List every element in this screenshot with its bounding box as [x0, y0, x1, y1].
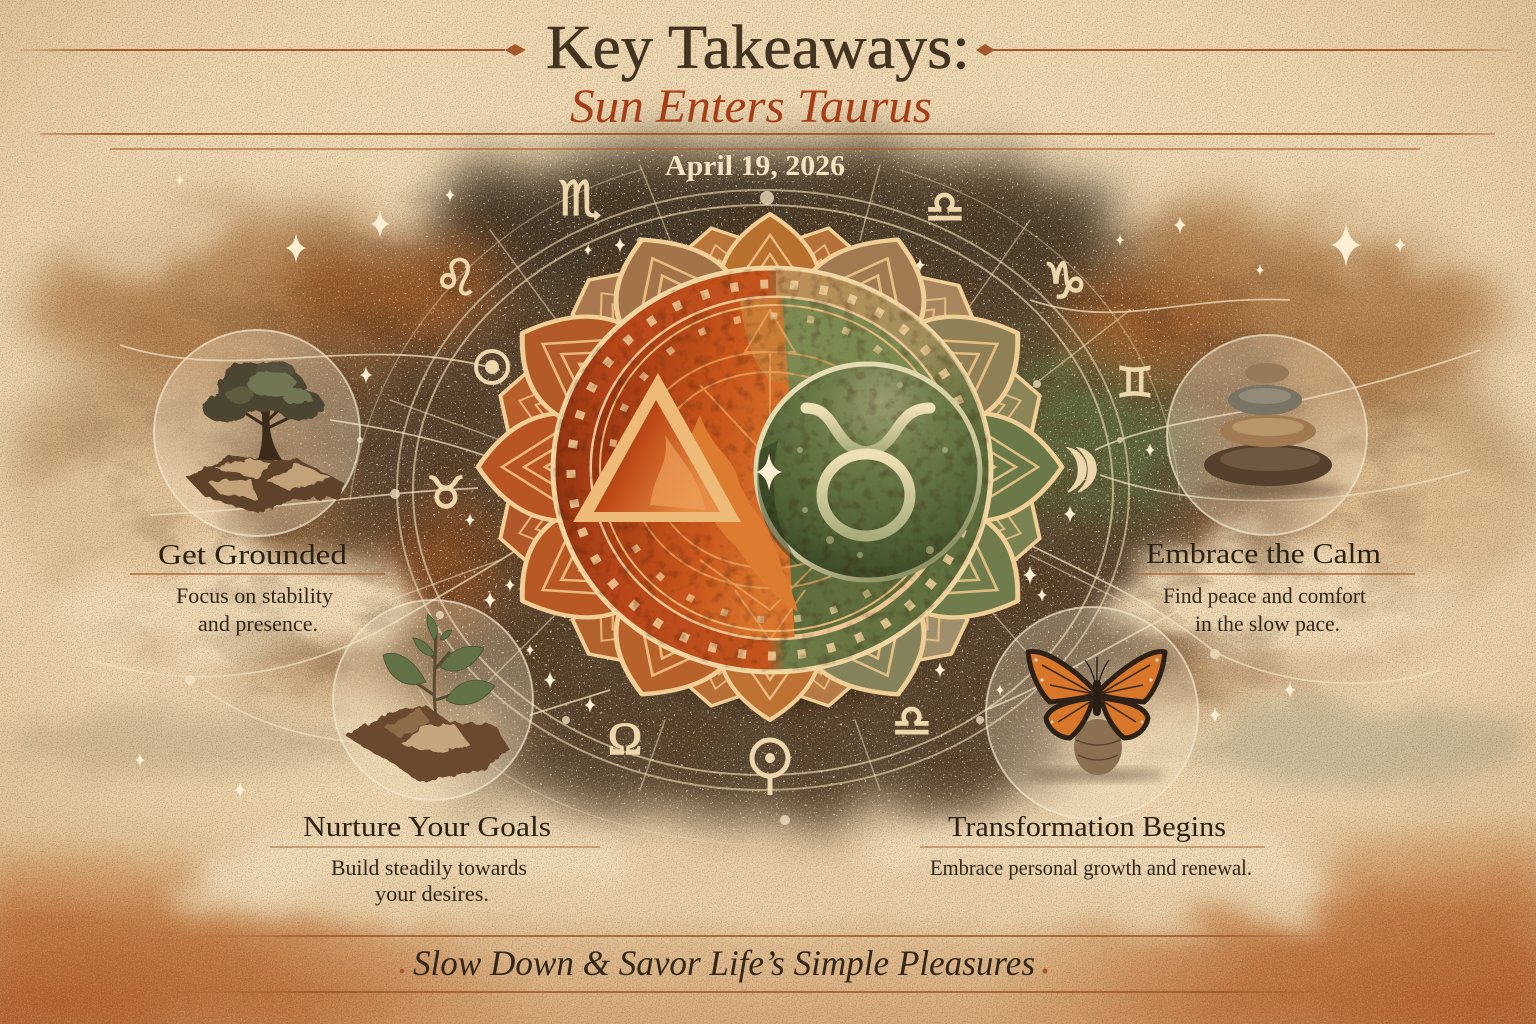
icon: butterfly on chrysalis: [1025, 652, 1165, 781]
icon: tree on rock: [187, 361, 344, 513]
zodiac glyphs: ♎︎: [925, 182, 965, 233]
text block: Nurture Your Goals: Build steadily towards: [331, 855, 527, 880]
zodiac glyphs: ♊︎: [1116, 358, 1154, 407]
bubble: butterfly: [986, 607, 1198, 819]
fire triangle: [573, 373, 741, 522]
zodiac glyphs: ♏︎: [558, 171, 602, 227]
icon: sprout in soil: [345, 614, 510, 782]
flames: [687, 415, 798, 612]
text block: Get Grounded: [130, 539, 385, 636]
bubble: sprout: [333, 600, 533, 800]
text block: Get Grounded: and presence.: [198, 611, 318, 636]
earth sphere: [756, 364, 980, 580]
mandala petals: [478, 214, 1062, 720]
text block: Transformation Begins: Embrace personal growth and renewal.: [930, 855, 1252, 880]
text block: Get Grounded: Focus on stability: [176, 583, 333, 608]
bubble: tree: [154, 330, 360, 536]
text block: Embrace the Calm: [1135, 538, 1415, 636]
text block: Embrace the Calm: Embrace the Calm: [1146, 538, 1381, 570]
disc texture: [553, 268, 991, 672]
zodiac glyphs: [426, 171, 1154, 795]
text block: Embrace the Calm: in the slow pace.: [1195, 611, 1340, 636]
icon: stacked stones: [1195, 363, 1345, 498]
connector lines with nodes: [90, 191, 1480, 825]
zodiac glyphs: ♌︎: [434, 249, 478, 307]
central mandala: [478, 214, 1062, 720]
inner disc: [585, 290, 960, 645]
title: Key Takeaways:: [546, 14, 970, 82]
zodiac glyphs: ♎︎: [892, 696, 932, 747]
text block: Embrace the Calm: Find peace and comfort: [1163, 583, 1366, 608]
title ornament lines: [20, 44, 1512, 149]
text block: Nurture Your Goals: [270, 811, 600, 906]
text block: Nurture Your Goals: Nurture Your Goals: [303, 811, 551, 843]
outer disc with split fire and earth colours: [553, 268, 991, 672]
text block: Get Grounded: Get Grounded: [158, 539, 348, 571]
zodiac glyphs: ♑︎: [1043, 252, 1087, 310]
footer banner: [200, 936, 1330, 992]
zodiac glyphs: Ω: [608, 713, 642, 764]
centre star: [756, 453, 782, 491]
date: April 19, 2026: [665, 151, 845, 182]
bubble: stacked stones: [1167, 335, 1367, 535]
taurus symbol: [806, 408, 930, 536]
sparkle stars: [135, 174, 1406, 798]
zodiac glyphs: ♉︎: [426, 468, 466, 519]
footer banner: Slow Down & Savor Life’s Simple Pleasures: [413, 943, 1035, 983]
text block: Nurture Your Goals: your desires.: [375, 881, 489, 906]
zodiac wheel rings and spokes: [350, 165, 1180, 845]
subtitle: Sun Enters Taurus: [570, 80, 932, 133]
text block: Transformation Begins: Transformation Begins: [948, 811, 1226, 843]
text block: Transformation Begins: [920, 811, 1265, 880]
